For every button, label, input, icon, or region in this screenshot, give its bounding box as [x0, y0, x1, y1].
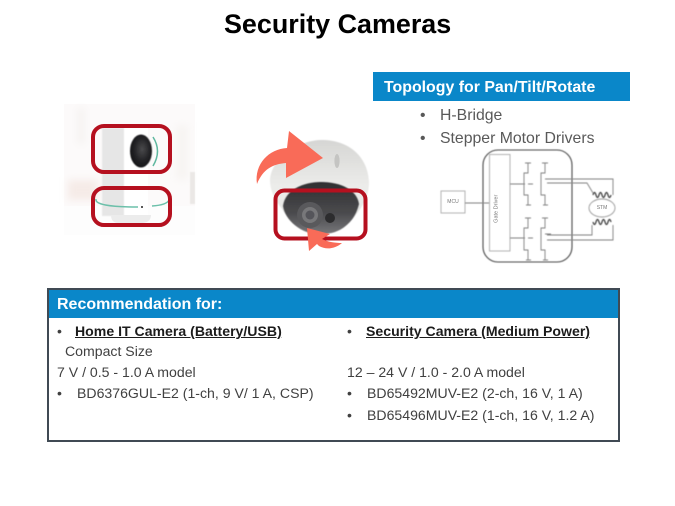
column: security camera: • [347, 385, 352, 401]
sub-heading: security camera: Security Camera (Medium Power) [366, 323, 590, 339]
list: topology types [420, 107, 595, 147]
heading: topology: Topology for Pan/Tilt/Rotate [384, 79, 595, 96]
label: gate driver: Gate Driver [493, 195, 499, 223]
column: security camera: • [347, 323, 352, 339]
heading bar: recommendation [49, 290, 618, 318]
label: STM: STM [597, 205, 607, 211]
column: home camera: • [57, 323, 62, 339]
highlight: camera tilt [93, 126, 170, 172]
panel: recommendation [47, 288, 620, 442]
column: home camera: BD6376GUL-E2 (1-ch, 9 V/ 1 A, CSP) [77, 385, 314, 401]
arrow: rotate [307, 228, 342, 251]
list: topology types: • [420, 130, 426, 147]
list: topology types: • [420, 107, 426, 124]
column: security camera: BD65492MUV-E2 (2-ch, 16 V, 1 A) [367, 385, 583, 401]
arrow: tilt [257, 131, 323, 184]
column: home camera: 7 V / 0.5 - 1.0 A model [57, 364, 196, 380]
heading text: Recommendation for: [57, 296, 222, 313]
column: home camera: • [57, 385, 62, 401]
column: security camera [347, 323, 594, 423]
highlight: camera pan [93, 188, 170, 225]
panel header: topology [373, 72, 630, 101]
title: Security Cameras [224, 9, 451, 39]
label: MCU: MCU [447, 199, 459, 205]
column: security camera: 12 – 24 V / 1.0 - 2.0 A model [347, 364, 525, 380]
column: home camera [57, 323, 314, 401]
column: home camera: Compact Size [65, 343, 153, 359]
column: security camera: • [347, 407, 352, 423]
highlight: lens [276, 190, 366, 238]
column: security camera: BD65496MUV-E2 (1-ch, 16 V, 1.2 A) [367, 407, 594, 423]
list: topology types: Stepper Motor Drivers [440, 130, 595, 147]
list: topology types: H-Bridge [440, 107, 502, 124]
sub-heading: home camera: Home IT Camera (Battery/USB) [75, 323, 282, 339]
